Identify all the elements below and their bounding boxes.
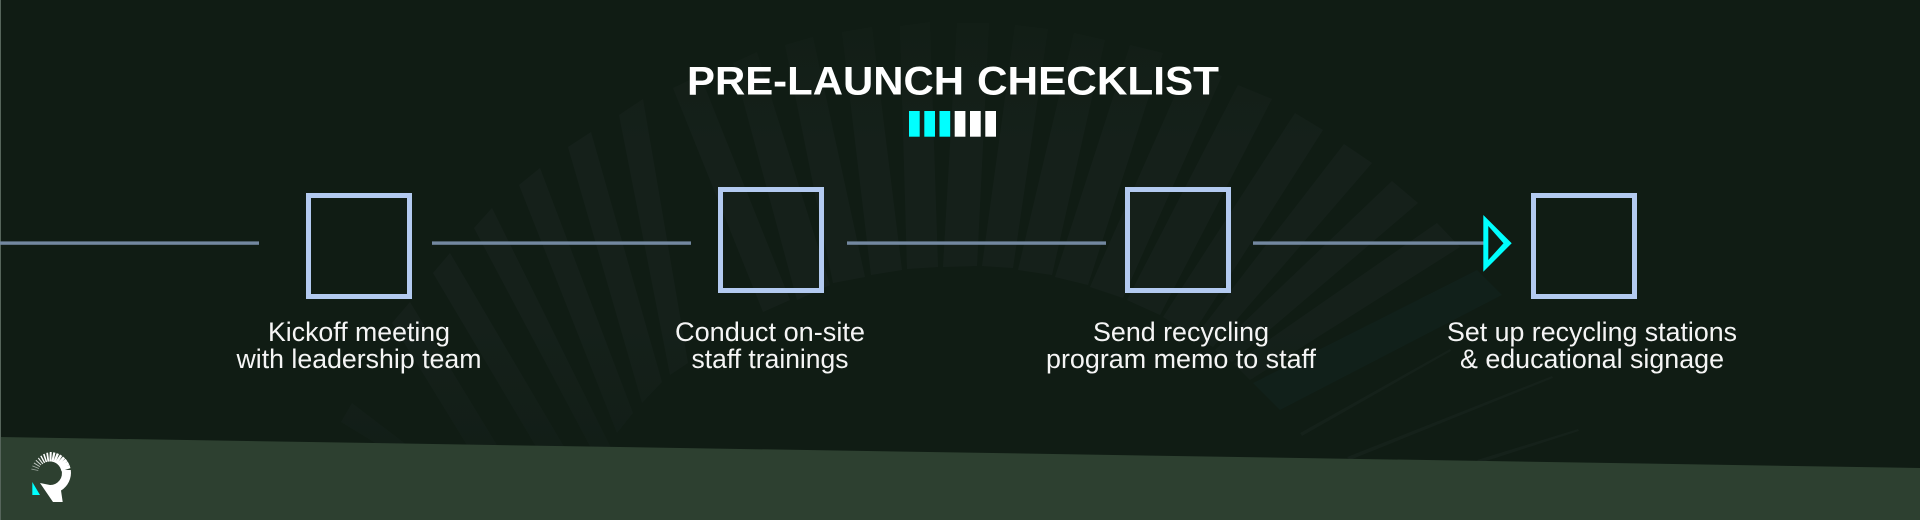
step 4 checkbox	[1534, 196, 1634, 296]
title accent bars	[909, 111, 996, 137]
step 2 label	[675, 317, 865, 374]
step 1 label: Kickoff meeting	[268, 317, 450, 347]
arrow from step 3 to step 4	[1253, 215, 1512, 272]
connector line step 2 to step 3	[847, 241, 1106, 245]
step 3 label: Send recycling	[1093, 317, 1269, 347]
connector line into step 1	[0, 241, 259, 245]
step 1 label: with leadership team	[235, 344, 482, 374]
step 2 label: staff trainings	[692, 344, 848, 374]
title	[687, 60, 1219, 104]
step 3 label	[1046, 317, 1317, 374]
title: CHECKLIST	[977, 60, 1219, 104]
step 2 label: Conduct on-site	[675, 317, 865, 347]
step 3 label: program memo to staff	[1046, 344, 1317, 374]
step 1 label	[235, 317, 482, 374]
step 3 checkbox	[1128, 190, 1228, 290]
teal background stripe	[1253, 270, 1502, 410]
bottom green band	[0, 437, 1920, 520]
step 4 label: & educational signage	[1460, 344, 1724, 374]
step 2 checkbox	[720, 190, 822, 290]
background fan of radial stripes	[341, 22, 1460, 455]
thin background rays	[1300, 349, 1579, 463]
step 4 label	[1447, 317, 1737, 374]
connector line step 1 to step 2	[432, 241, 691, 245]
step 1 checkbox	[308, 196, 410, 296]
title: PRE-LAUNCH	[687, 60, 964, 104]
step 4 label: Set up recycling stations	[1447, 317, 1737, 347]
left edge line	[0, 0, 1, 520]
logo	[31, 452, 71, 502]
